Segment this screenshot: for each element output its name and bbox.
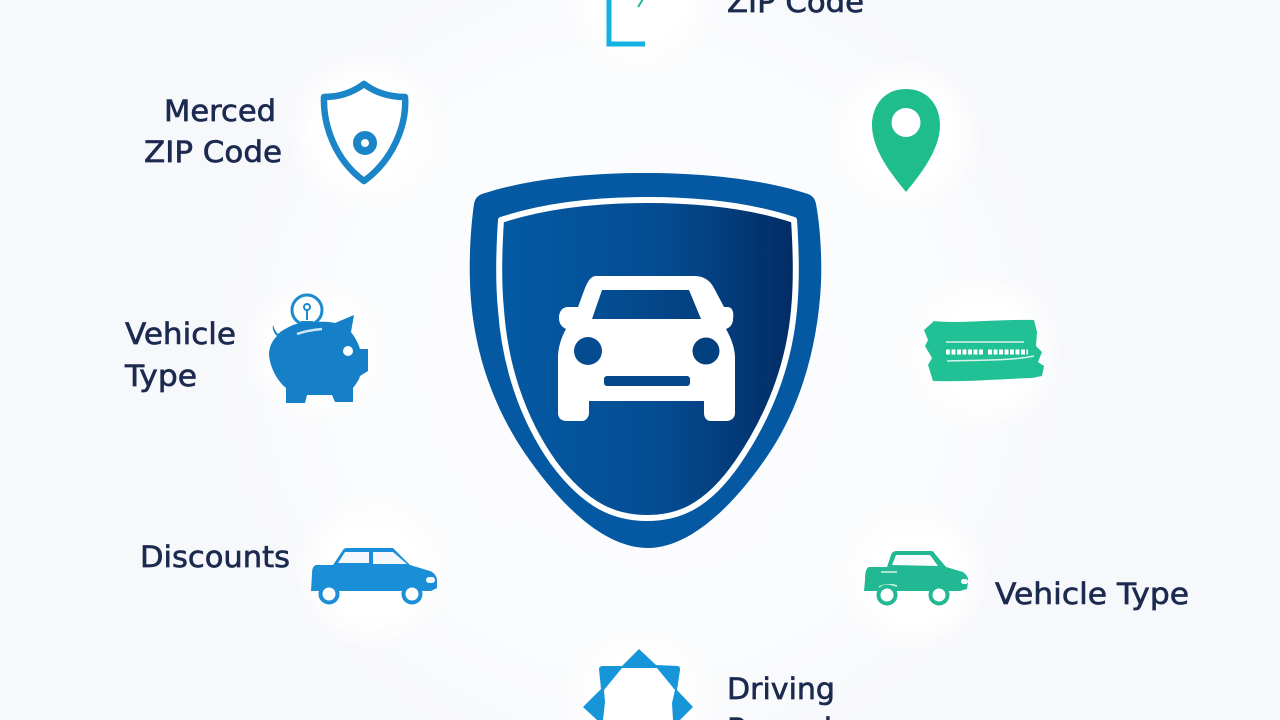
shield outer [470,173,821,548]
central shield with car [470,173,821,548]
label: Vehicle [125,317,236,351]
label: Driving [727,672,835,706]
factor: banknote right [924,320,1044,381]
factor: Vehicle Type left [124,295,368,403]
label: ZIP Code [144,135,282,169]
icon: green banknote [924,320,1044,381]
factor: location pin [872,89,940,192]
icon: document corner [609,0,645,44]
label: Merced [164,94,276,128]
icon: green car side [864,551,968,604]
factor: Discounts [140,540,437,602]
label: Discounts [140,540,290,574]
icon: car front [558,276,735,421]
icon: piggy bank [269,295,368,403]
icon: shield outline [324,84,405,181]
factor: Vehicle Type right [864,551,1189,611]
label: Vehicle Type [995,577,1189,611]
top factor: ZIP Code [609,0,864,44]
bottom factor: Driving Record [583,649,835,720]
icon: map pin [872,89,940,192]
factor: Merced ZIP Code [144,84,405,181]
shield inner with white ring [499,200,796,518]
icon: blue badge [583,649,693,720]
icon: blue car side [311,548,437,602]
label: Type [124,359,197,393]
